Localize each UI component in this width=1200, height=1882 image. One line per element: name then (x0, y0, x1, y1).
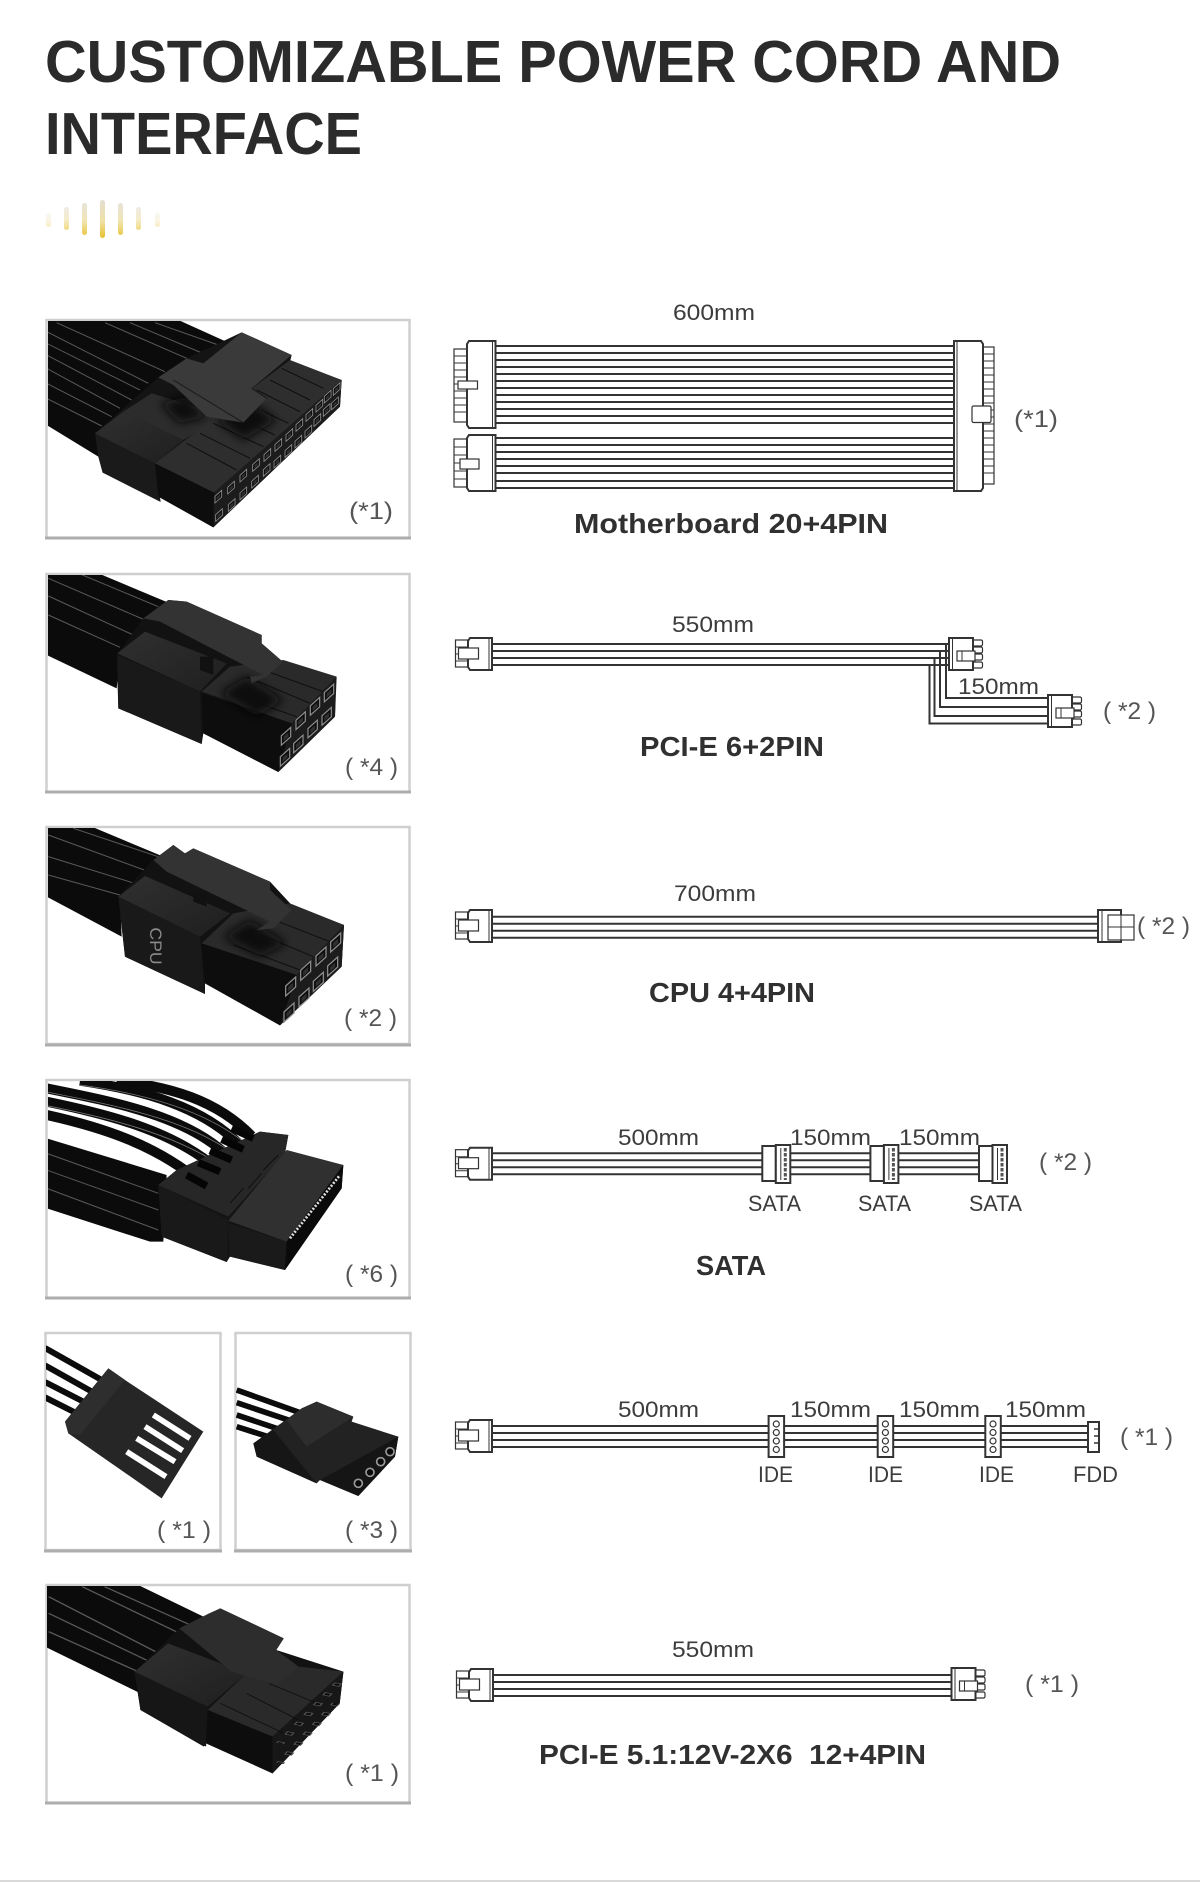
count label: ( *1 ) (1120, 1424, 1173, 1451)
photo: 12+4 pin connector (45, 1585, 343, 1773)
plug labels: SATA (858, 1191, 911, 1216)
panel: FDD connector photo (44, 1333, 222, 1551)
connector: PSU end (456, 638, 492, 670)
wires (495, 346, 954, 488)
count label: ( *4 ) (345, 754, 398, 781)
plug labels: FDD (1073, 1462, 1118, 1487)
connector: PSU end (456, 1148, 492, 1180)
wires (492, 1675, 952, 1696)
plug labels: SATA (748, 1191, 801, 1216)
diagram: PCI-E 6+2 pin cable (456, 612, 1156, 762)
length labels: 500mm (618, 1125, 699, 1150)
count label: ( *2 ) (1103, 698, 1156, 725)
connector: 6+2 end (949, 638, 982, 670)
count label: ( *1 ) (345, 1760, 399, 1787)
connector: CPU end (1098, 910, 1134, 942)
panel: PCI-E 6+2 pin photo (45, 573, 411, 792)
wires (492, 1426, 1090, 1447)
count label: ( *2 ) (344, 1005, 397, 1032)
photo: SATA connector (47, 1081, 343, 1270)
photo: CPU connector (47, 827, 344, 1025)
length label: 700mm (674, 881, 756, 906)
length labels: 150mm (899, 1397, 980, 1422)
diagram: PCI-E 5.1 12V-2X6 cable (456, 1637, 1079, 1770)
title: INTERFACE (45, 101, 362, 167)
diagram: motherboard 20+4 cable (454, 300, 1058, 539)
count label: ( *3 ) (345, 1517, 398, 1544)
plug labels: IDE (868, 1462, 903, 1487)
count label: ( *2 ) (1137, 913, 1190, 940)
length labels: 150mm (790, 1397, 871, 1422)
count label: (*1) (349, 498, 393, 525)
length labels: 150mm (899, 1125, 980, 1150)
connector: PSU end (456, 1420, 492, 1452)
heading: SATA (696, 1250, 766, 1281)
connector: PSU end (456, 1669, 493, 1701)
connector: PSU end (456, 910, 492, 942)
count label: (*1) (1014, 406, 1058, 433)
wires (492, 1153, 980, 1174)
heading: PCI-E 5.1:12V-2X6 12+4PIN (539, 1739, 926, 1770)
diagram: SATA cable (456, 1125, 1092, 1281)
diagram: CPU 4+4 pin cable (456, 881, 1190, 1008)
wires and branch (492, 644, 1048, 724)
plug labels: IDE (979, 1462, 1014, 1487)
connectors: SATA plugs (762, 1145, 1007, 1183)
plug labels: SATA (969, 1191, 1022, 1216)
count label: ( *2 ) (1039, 1149, 1092, 1176)
photo: 8-pin PCI-E connector (47, 573, 337, 772)
heading: PCI-E 6+2PIN (640, 731, 824, 762)
count label: ( *6 ) (345, 1261, 398, 1288)
length label: 550mm (672, 1637, 754, 1662)
wires (492, 917, 1098, 938)
photo: CPU connector: CPU (146, 927, 165, 965)
connector: right 24 pin (954, 341, 994, 491)
connector: left 4 pin (454, 435, 496, 491)
title (45, 29, 1061, 167)
photo: FDD connector (45, 1348, 203, 1498)
panel: CPU 4+4 pin photo (45, 827, 411, 1045)
diagram: IDE and FDD cable (456, 1397, 1173, 1487)
plug labels (748, 1191, 1022, 1216)
plug labels (758, 1462, 1118, 1487)
connectors: IDE plugs (769, 1416, 1001, 1457)
panel: PCI-E 5.1 12+4 pin photo (45, 1585, 411, 1803)
connector: FDD plug (1088, 1422, 1099, 1452)
length labels: 500mm (618, 1397, 699, 1422)
panel: IDE connector photo (234, 1333, 412, 1551)
length labels (618, 1125, 980, 1150)
photo: 24-pin connector (47, 320, 342, 527)
count label: ( *1 ) (157, 1517, 211, 1544)
plug labels: IDE (758, 1462, 793, 1487)
icon: gold equalizer bars (46, 200, 160, 238)
length label: 600mm (673, 300, 755, 325)
connector: GPU end (952, 1668, 985, 1700)
length labels: 150mm (790, 1125, 871, 1150)
heading: CPU 4+4PIN (649, 977, 815, 1008)
panel: motherboard connector photo (45, 320, 411, 538)
connector: left 20 pin (454, 341, 496, 428)
heading: Motherboard 20+4PIN (574, 508, 888, 539)
length labels: 150mm (1005, 1397, 1086, 1422)
photo: IDE connector (237, 1390, 398, 1496)
count label: ( *1 ) (1025, 1671, 1079, 1698)
length label: 550mm (672, 612, 754, 637)
title: CUSTOMIZABLE POWER CORD AND (45, 29, 1061, 95)
length labels (618, 1397, 1086, 1422)
connector: branch 6+2 end (1048, 695, 1082, 727)
bottom rule (0, 1880, 1200, 1882)
branch length label: 150mm (958, 674, 1039, 699)
panel: SATA connector photo (45, 1080, 411, 1298)
